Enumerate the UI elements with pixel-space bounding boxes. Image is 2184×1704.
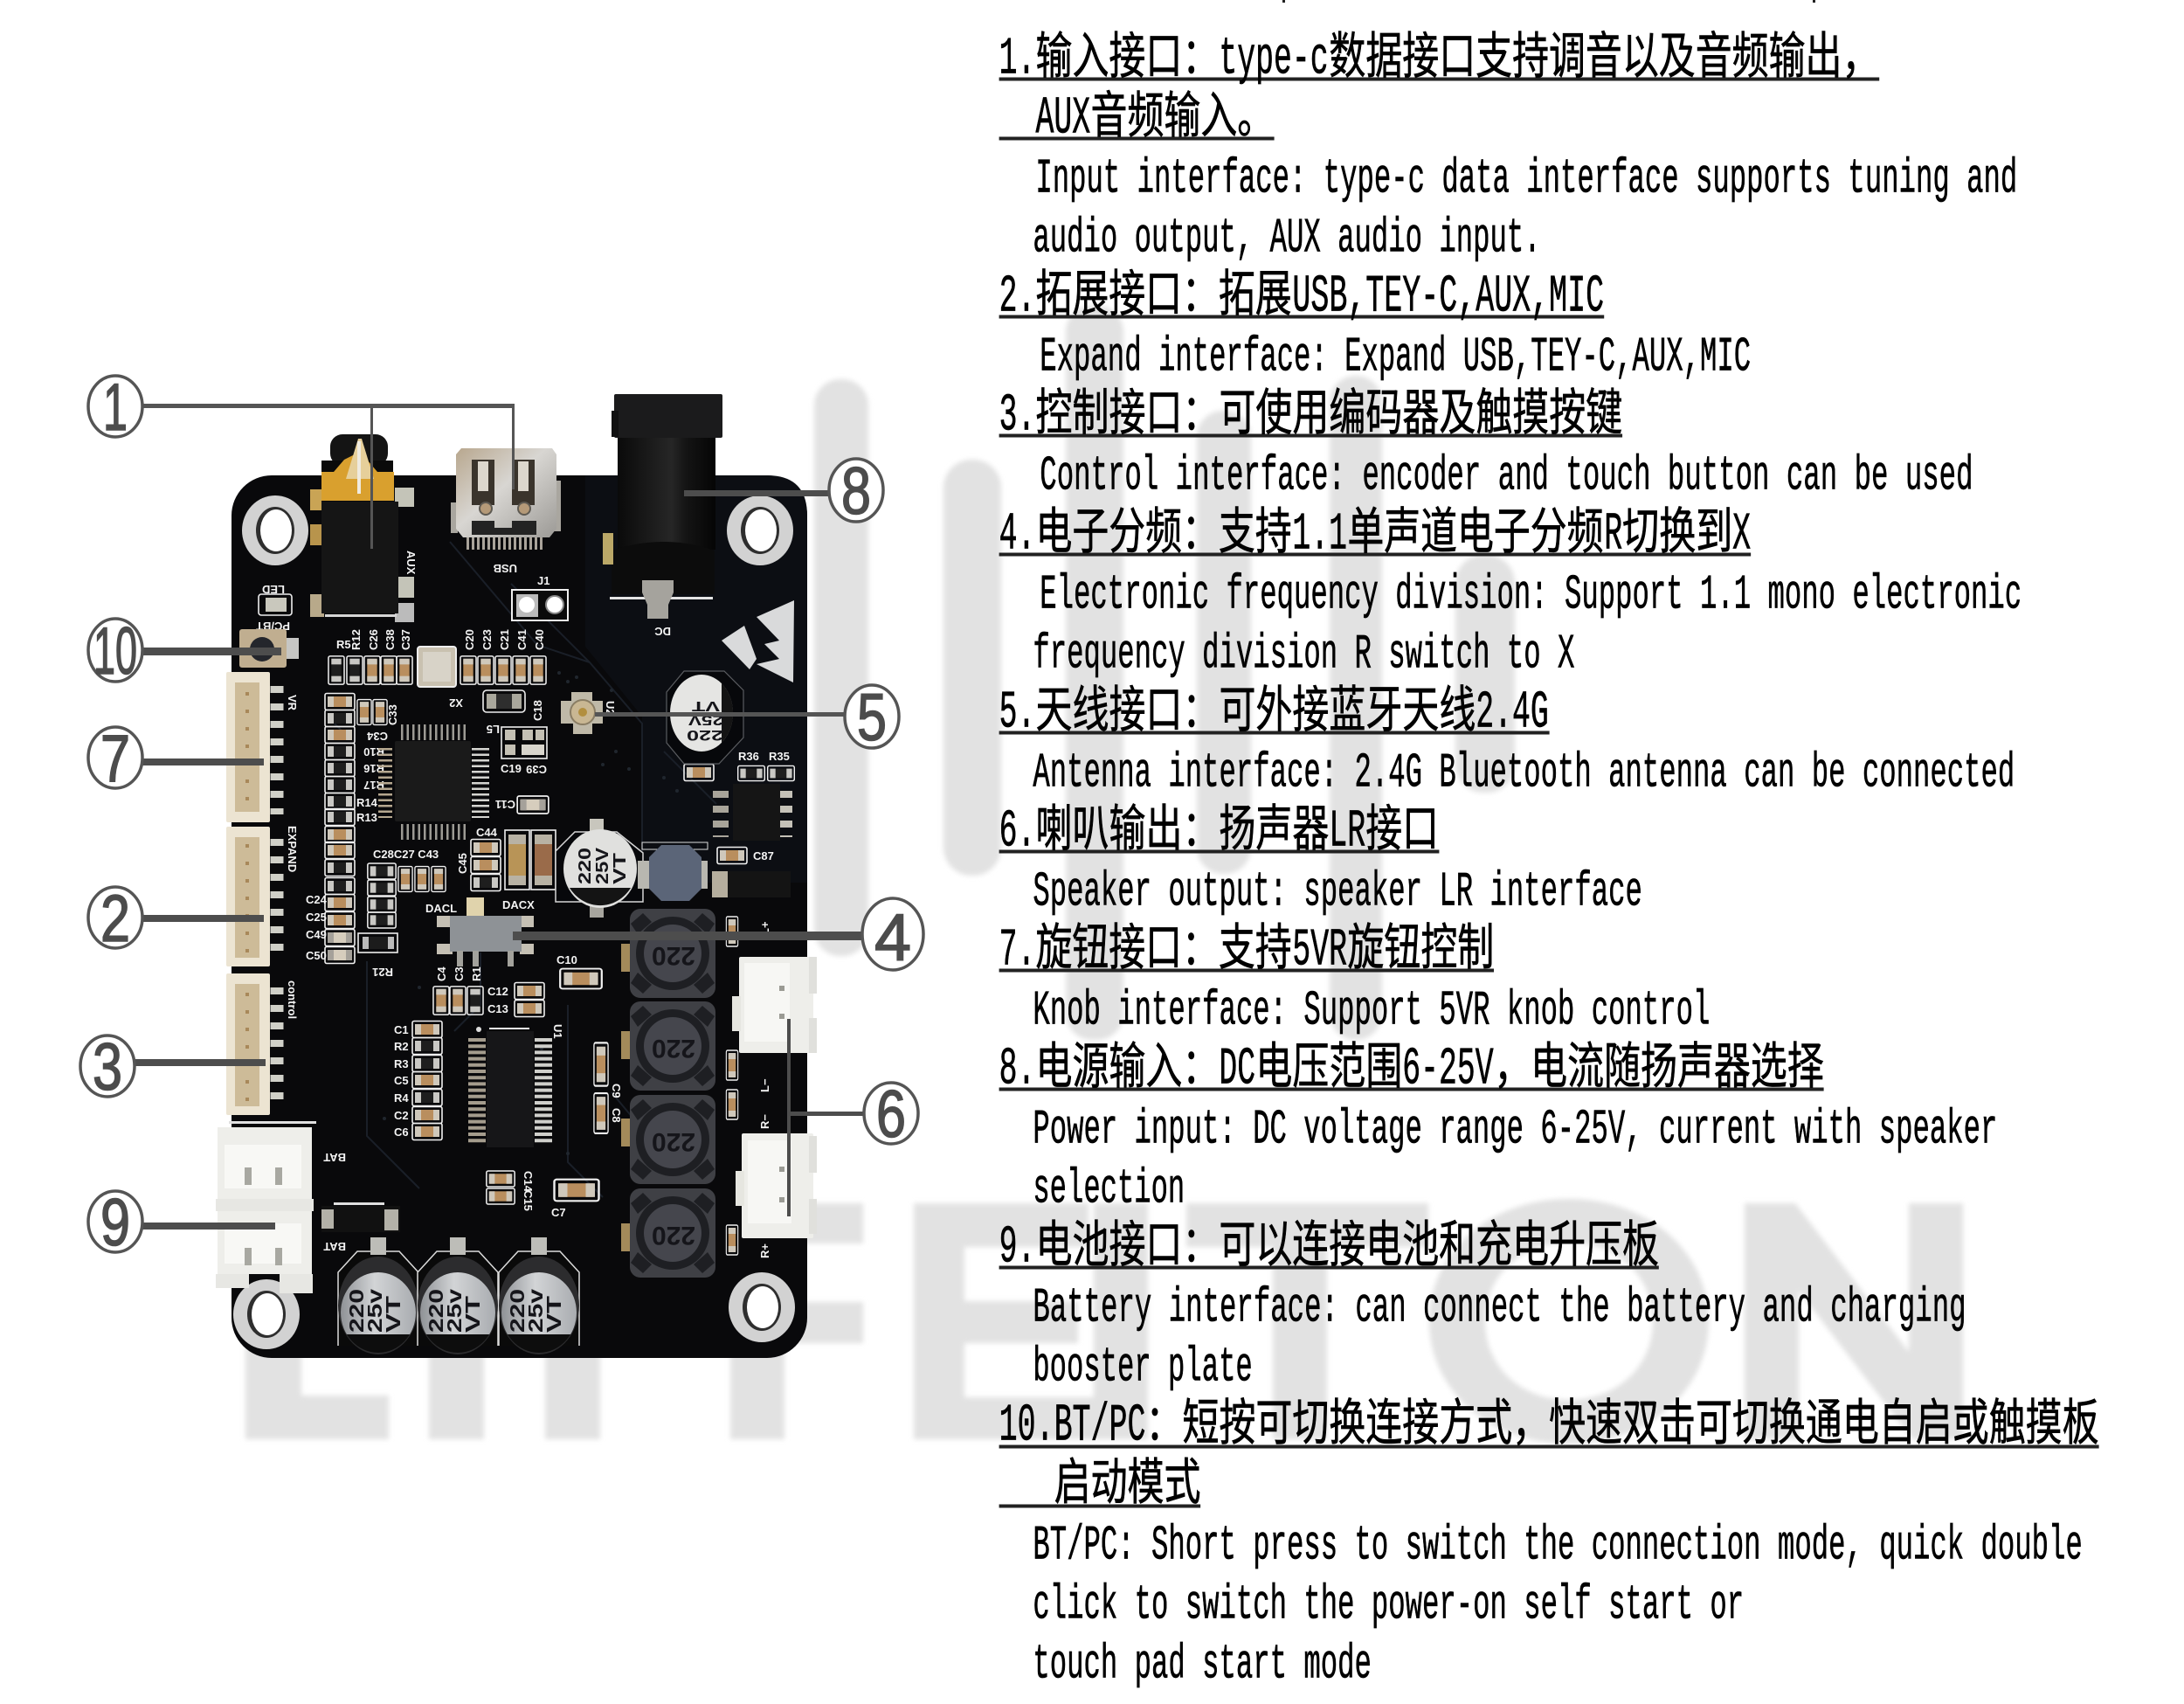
- item 5: antenna interface: 2.4G: [1476, 682, 1549, 743]
- callout 3: 3: [93, 1030, 122, 1105]
- lower SMD group: [394, 750, 794, 1255]
- lower SMD group: R1: [470, 966, 483, 981]
- icon: antenna connector U2: [561, 692, 617, 734]
- callout 5: 5: [857, 681, 887, 755]
- icon: main QFP chip: [385, 732, 480, 832]
- callout 7: 7: [100, 722, 130, 796]
- watermark: upper rounded stems: [814, 306, 1515, 1040]
- top row of SMD parts: [328, 629, 546, 710]
- callout 5: [595, 681, 899, 755]
- icon: four power inductors: R+: [758, 1243, 771, 1258]
- top row of SMD parts: C20: [463, 629, 476, 650]
- mid SMD group: C44: [476, 826, 498, 839]
- icon: U5 small IC: [712, 784, 791, 897]
- mid SMD group: C28C27 C43: [373, 848, 439, 861]
- item 4: electronic frequency division: 4.: [999, 504, 1035, 565]
- left column of SMD parts: C25: [306, 911, 327, 924]
- item 4: electronic frequency division: 1.1: [1292, 504, 1347, 565]
- lower SMD group: C3: [453, 966, 466, 981]
- board substrate: [232, 475, 807, 1358]
- item 2: expand interface: [999, 267, 1751, 385]
- icon: four power inductors: [621, 909, 771, 1278]
- icon: four power inductors: 220: [652, 1221, 695, 1250]
- icon: four power inductors: L+: [758, 921, 771, 935]
- icon: LED and PC/BT button: PC/BT: [256, 620, 290, 633]
- callout 6 with bracket to speaker connectors: [787, 1019, 918, 1216]
- left column of SMD parts: C34: [366, 730, 388, 743]
- mid SMD group: [358, 690, 556, 979]
- icon: four power inductors: 220: [652, 1127, 695, 1156]
- lower SMD group: C8: [610, 1108, 623, 1123]
- icon: expansion pin connectors: VR: [286, 695, 299, 711]
- icon: U1 amplifier chip: [476, 1024, 564, 1147]
- item 8: power input: DC: [1219, 1039, 1255, 1099]
- icon: DAC slide switch: DACL: [425, 902, 457, 915]
- item 5: antenna interface: [999, 682, 2015, 801]
- item 5: antenna interface: 5.: [999, 682, 1035, 743]
- icon: U1 amplifier chip: U1: [551, 1024, 564, 1039]
- callout 10: 10: [93, 614, 137, 689]
- top row of SMD parts: C41: [515, 629, 529, 650]
- icon: four power inductors: 220: [652, 941, 695, 970]
- item 7: knob interface: 旋钮控制: [1347, 921, 1494, 980]
- callout 9: [88, 1186, 275, 1260]
- icon: three bottom capacitors: 25v: [524, 1289, 547, 1333]
- lower SMD group: C87: [753, 849, 774, 862]
- lower SMD group: C9: [610, 1084, 623, 1098]
- left column of SMD parts: R10: [363, 745, 384, 758]
- mid SMD group: L5: [487, 723, 500, 736]
- icon: expansion pin connectors: [226, 672, 299, 1115]
- icon: expansion pin connectors: control: [286, 980, 299, 1019]
- icon: board logo: [722, 600, 794, 682]
- item 1: input interface: 音频输入。: [1091, 89, 1274, 149]
- callout 7: [88, 722, 264, 796]
- icon: four power inductors: 220: [652, 1034, 695, 1063]
- icon: three bottom capacitors: 220: [425, 1289, 447, 1333]
- icon: speaker connectors: [732, 957, 817, 1238]
- callout 1 with leader to AUX and USB: [88, 371, 515, 549]
- item 2: expand interface: USB,TEY-C,AUX,MIC: [1292, 267, 1604, 327]
- mounting holes: [233, 495, 795, 1349]
- icon: LED and PC/BT button: LED: [262, 583, 285, 596]
- clipped text marks at the top edge: [1282, 0, 1815, 3]
- mid SMD group: C19: [501, 762, 522, 775]
- icon: battery connectors: [216, 1121, 400, 1293]
- item 10: BT/PC button: 10.BT/PC: [999, 1396, 1146, 1456]
- item 9: battery interface: 电池接口：可以连接电池和充电升压板: [1036, 1218, 1659, 1278]
- icon: three bottom capacitors: 220: [506, 1289, 529, 1333]
- item 7: knob interface: 7.: [999, 920, 1035, 980]
- item 10: BT/PC button: [999, 1396, 2099, 1693]
- lower SMD group: R36: [738, 750, 759, 763]
- item 9: battery interface: booster plate: [1033, 1340, 1253, 1396]
- left column of SMD parts: C33: [386, 704, 399, 725]
- item 1: input interface: AUX: [1036, 88, 1090, 149]
- item 1: input interface: 1.: [999, 29, 1035, 89]
- callout 1 with leader to AUX and USB: 1: [103, 371, 128, 445]
- item 7: knob interface: 5VR: [1292, 920, 1347, 980]
- icon: DAC slide switch: [425, 897, 535, 966]
- item 8: power input: 6-25V: [1402, 1039, 1494, 1099]
- item 5: antenna interface: 天线接口：可外接蓝牙天线: [1036, 683, 1476, 743]
- icon: four power inductors: R−: [758, 1114, 771, 1129]
- icon: capacitor middle: 220: [576, 848, 595, 884]
- top row of SMD parts: C21: [498, 629, 511, 650]
- left column of SMD parts: C49: [306, 928, 327, 941]
- item 4: electronic frequency division: 电子分频：支持: [1036, 505, 1292, 565]
- item 3: control interface: 3.: [999, 385, 1035, 446]
- lower SMD group: R3: [394, 1057, 409, 1070]
- item 2: expand interface: 拓展接口：拓展: [1036, 267, 1292, 327]
- mid SMD group: C39: [526, 763, 547, 776]
- item 8: power input: [999, 1039, 1997, 1217]
- item 10: BT/PC button: 启动模式: [1054, 1456, 1201, 1515]
- lower SMD group: C14: [522, 1171, 535, 1193]
- item 8: power input: ，电流随扬声器选择: [1494, 1040, 1824, 1099]
- callout 9: 9: [100, 1186, 130, 1260]
- top row of SMD parts: X2: [449, 696, 463, 710]
- icon: three bottom capacitors: 25v: [363, 1289, 386, 1333]
- icon: capacitor middle: VT: [611, 853, 630, 884]
- item 1: input interface: [999, 29, 2017, 267]
- lower SMD group: R4: [394, 1091, 409, 1105]
- lower SMD group: C13: [487, 1002, 508, 1015]
- icon: capacitor middle: [556, 819, 643, 918]
- icon: battery connectors: BAT: [323, 1240, 346, 1253]
- item 7: knob interface: [999, 920, 1710, 1039]
- item 4: electronic frequency division: 单声道电子分频: [1347, 505, 1604, 565]
- icon: J1 header: J1: [537, 574, 549, 587]
- item 4: electronic frequency division: 切换到: [1622, 505, 1732, 565]
- lower SMD group: C1: [394, 1023, 409, 1036]
- icon: capacitor top right: 220: [687, 727, 723, 744]
- icon: battery connectors: BAT: [323, 1151, 346, 1164]
- item 8: power input: selection: [1033, 1161, 1185, 1217]
- left column of SMD parts: R13: [356, 811, 377, 824]
- top row of SMD parts: C37: [399, 629, 412, 650]
- lower SMD group: C10: [556, 953, 577, 966]
- item 9: battery interface: 9.: [999, 1217, 1035, 1278]
- icon: USB type-C connector: [451, 448, 561, 575]
- icon: capacitor middle: 25V: [593, 847, 612, 884]
- icon: DC power jack: DC: [654, 625, 671, 638]
- top row of SMD parts: R12: [349, 629, 363, 650]
- callout 6 with bracket to speaker connectors: 6: [876, 1077, 906, 1152]
- item 6: speaker output: 6.: [999, 801, 1035, 862]
- icon: antenna connector U2: U2: [604, 701, 617, 716]
- callout 2: 2: [100, 882, 130, 956]
- icon: capacitor top right: [667, 671, 743, 764]
- item 1: input interface: audio output, AUX audio input.: [1033, 211, 1541, 267]
- mid SMD group: C11: [495, 798, 515, 811]
- lower SMD group: C6: [394, 1126, 409, 1139]
- callout 4: 4: [874, 901, 911, 975]
- item 6: speaker output: 接口: [1365, 802, 1439, 862]
- left column of SMD parts: R16: [363, 762, 384, 775]
- top row of SMD parts: C23: [480, 629, 494, 650]
- icon: AUX audio jack: AUX: [404, 551, 418, 575]
- item 8: power input: 8.: [999, 1039, 1035, 1099]
- item 1: input interface: 输入接口：: [1036, 30, 1219, 89]
- item 7: knob interface: Knob interface: Support 5VR knob control: [1033, 983, 1710, 1039]
- top row of SMD parts: R5: [336, 638, 351, 651]
- left column of SMD parts: R17: [363, 779, 384, 792]
- item 8: power input: 电压范围: [1255, 1040, 1402, 1099]
- lower SMD group: C2: [394, 1109, 409, 1122]
- top row of SMD parts: C38: [384, 629, 397, 650]
- icon: capacitor top right: VT: [692, 698, 720, 713]
- panel: interface description list: [999, 29, 2099, 1693]
- item 1: input interface: 数据接口支持调音以及音频输出，: [1329, 30, 1878, 89]
- watermark: brand letters: [245, 306, 1963, 1444]
- left column of SMD parts: C24: [306, 893, 328, 906]
- icon: three bottom capacitors: VT: [543, 1296, 565, 1333]
- item 2: expand interface: 2.: [999, 267, 1035, 327]
- item 6: speaker output: [999, 801, 1642, 920]
- icon: USB type-C connector: USB: [494, 562, 517, 575]
- top row of SMD parts: C26: [367, 629, 380, 650]
- callout 8: [684, 454, 883, 529]
- lower SMD group: C15: [522, 1190, 535, 1211]
- icon: three bottom capacitors: [338, 1237, 579, 1354]
- icon: three bottom capacitors: VT: [382, 1296, 404, 1333]
- item 9: battery interface: [999, 1217, 1966, 1396]
- callout 8: 8: [841, 454, 871, 529]
- icon: DAC slide switch: DACX: [502, 898, 535, 911]
- item 4: electronic frequency division: R: [1604, 504, 1622, 565]
- left column of SMD parts: C50: [306, 949, 327, 962]
- item 4: electronic frequency division: frequency division R switch to X: [1033, 627, 1574, 682]
- item 3: control interface: [999, 385, 1973, 504]
- icon: three bottom capacitors: 25v: [443, 1289, 466, 1333]
- lower SMD group: R2: [394, 1040, 409, 1053]
- callout 3: [80, 1030, 266, 1105]
- lower SMD group: C4: [435, 966, 448, 981]
- mid SMD group: C45: [456, 853, 469, 874]
- callout 2: [88, 882, 264, 956]
- left column of SMD parts: [306, 694, 399, 963]
- lower SMD group: R35: [769, 750, 790, 763]
- panel: numbered callouts: [80, 371, 923, 1260]
- callout 10: [88, 614, 281, 689]
- item 6: speaker output: 喇叭输出：扬声器: [1036, 802, 1329, 862]
- item 10: BT/PC button: touch pad start mode: [1033, 1637, 1372, 1693]
- item 4: electronic frequency division: X: [1732, 504, 1751, 565]
- lower SMD group: C5: [394, 1074, 409, 1087]
- item 8: power input: 电源输入：: [1036, 1040, 1219, 1099]
- icon: small inductor: [638, 842, 708, 901]
- icon: AUX audio jack: [310, 434, 418, 622]
- icon: J1 header: [512, 574, 568, 620]
- lower SMD group: C12: [487, 985, 508, 998]
- panel: PCB board photo: [216, 394, 817, 1358]
- icon: four power inductors: L−: [758, 1078, 771, 1092]
- icon: three bottom capacitors: 220: [345, 1289, 368, 1333]
- left column of SMD parts: R14: [356, 796, 378, 809]
- item 4: electronic frequency division: [999, 504, 2022, 682]
- watermark: lower word: [245, 1199, 1963, 1444]
- top row of SMD parts: C40: [533, 629, 546, 650]
- icon: three bottom capacitors: VT: [461, 1296, 484, 1333]
- item 1: input interface: type-c: [1219, 29, 1329, 89]
- item 3: control interface: 控制接口：可使用编码器及触摸按键: [1036, 386, 1622, 446]
- icon: capacitor top right: 25V: [688, 712, 723, 727]
- callout 4: [513, 898, 923, 975]
- icon: expansion pin connectors: EXPAND: [286, 826, 299, 872]
- item 7: knob interface: 旋钮接口：支持: [1036, 921, 1292, 980]
- icon: LED and PC/BT button: [239, 583, 299, 668]
- item 6: speaker output: Speaker output: speaker LR interface: [1033, 864, 1642, 920]
- lower SMD group: C7: [551, 1206, 566, 1219]
- mid SMD group: R21: [372, 966, 393, 979]
- item 6: speaker output: LR: [1329, 801, 1365, 862]
- mid SMD group: C18: [531, 700, 544, 721]
- icon: DC power jack: [603, 394, 722, 638]
